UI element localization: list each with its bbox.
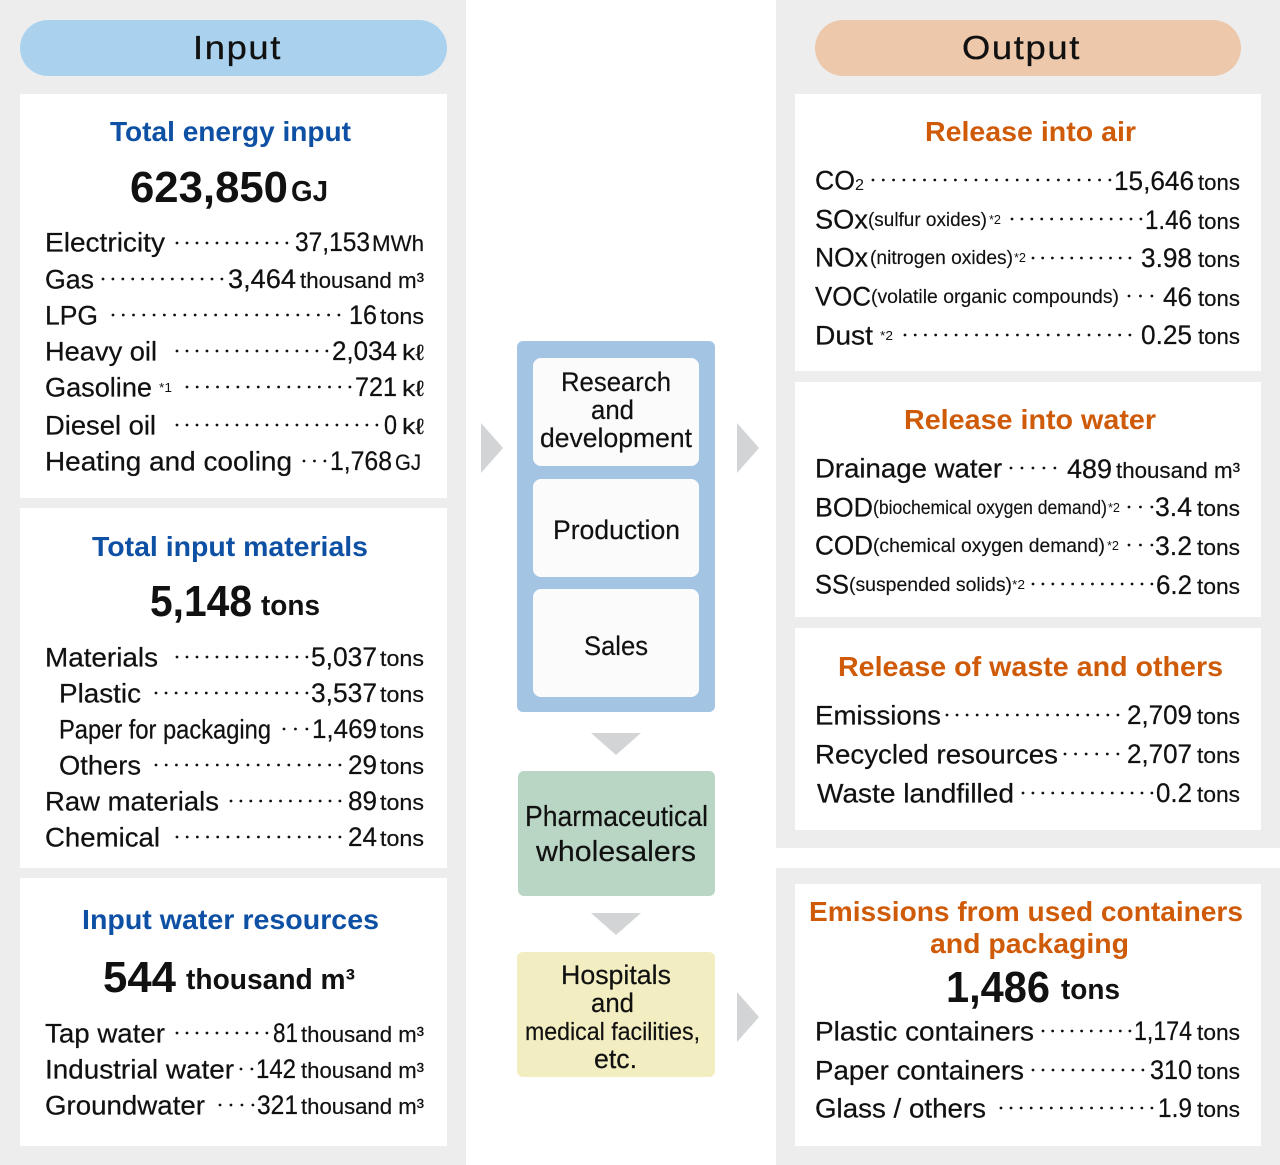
row: heavy oil xyxy=(45,336,425,366)
panel: output background upper xyxy=(776,0,1280,848)
row: groundwater: thousand m³ xyxy=(301,1094,424,1119)
row: diesel oil: 0 xyxy=(384,410,397,440)
row: recycled resources: 2,707 xyxy=(1127,739,1192,769)
row: SS: 6.2 xyxy=(1156,570,1192,600)
row: heating and cooling: Heating and cooling xyxy=(45,446,292,476)
row: SOx: SOx xyxy=(815,204,868,234)
row: diesel oil: Diesel oil xyxy=(45,410,156,440)
row: NOx: NOx xyxy=(815,242,868,272)
total: 544 thousand m3: thousand m³ xyxy=(186,964,355,996)
row: glass and others: Glass / others xyxy=(815,1093,986,1123)
row: COD: 3.2 xyxy=(1155,531,1192,561)
row: heating and cooling: GJ xyxy=(395,450,421,475)
row: chemical xyxy=(45,822,424,852)
row: plastic containers: tons xyxy=(1197,1020,1240,1045)
heading: Output: Output xyxy=(962,29,1081,66)
row: BOD: tons xyxy=(1197,496,1240,521)
row: NOx: tons xyxy=(1198,247,1240,272)
row: electricity: Electricity xyxy=(45,227,166,257)
row: waste landfilled xyxy=(817,778,1240,808)
row: SOx: 1.46 xyxy=(1145,205,1192,235)
row: gasoline: Gasoline xyxy=(45,372,152,402)
arrow: process to output xyxy=(737,423,759,473)
row: gas: 3,464 xyxy=(228,264,296,294)
panel: emissions from used containers xyxy=(795,884,1261,1146)
row: dust: tons xyxy=(1198,324,1240,349)
row: groundwater: 321 xyxy=(257,1090,298,1120)
row: diesel oil: kℓ xyxy=(402,414,425,439)
box: hospitals and medical facilities: Hospitals xyxy=(561,960,671,990)
heading: Input: Input xyxy=(193,29,282,66)
row: paper containers: Paper containers xyxy=(815,1055,1024,1085)
title: emissions from used containers and packaging: Emissions from used containers xyxy=(809,896,1243,927)
box: research and development: development xyxy=(540,423,692,453)
row: paper for packaging: tons xyxy=(380,718,424,743)
box: research and development: and xyxy=(591,395,634,425)
row: dust: *2 xyxy=(880,328,893,343)
row: glass and others: tons xyxy=(1197,1097,1240,1122)
panel: company process xyxy=(517,341,715,712)
row: glass and others: 1.9 xyxy=(1158,1093,1192,1123)
row: gasoline xyxy=(45,372,425,402)
box: production xyxy=(533,479,699,577)
box: pharmaceutical wholesalers xyxy=(518,771,715,896)
row: heavy oil: 2,034 xyxy=(332,336,397,366)
heading: Input xyxy=(20,20,447,76)
row: materials: Materials xyxy=(45,642,158,672)
row: waste landfilled: tons xyxy=(1197,782,1240,807)
row: COD: *2 xyxy=(1107,538,1119,553)
row: raw materials: Raw materials xyxy=(45,786,219,816)
box: research and development xyxy=(533,358,699,466)
row: BOD: BOD xyxy=(815,492,873,522)
box: hospitals and medical facilities xyxy=(517,952,715,1077)
row: drainage water: Drainage water xyxy=(815,453,1002,483)
row: others: tons xyxy=(380,754,424,779)
row: drainage water: 489 xyxy=(1067,454,1112,484)
row: plastic xyxy=(59,678,424,708)
row: BOD xyxy=(815,492,1240,522)
row: VOC: (volatile organic compounds) xyxy=(871,287,1119,308)
row: VOC: tons xyxy=(1198,286,1240,311)
row: LPG: LPG xyxy=(45,300,98,330)
row: electricity: MWh xyxy=(372,231,424,256)
row: electricity xyxy=(45,227,424,257)
row: heavy oil: Heavy oil xyxy=(45,336,157,366)
row: plastic: tons xyxy=(380,682,424,707)
box: hospitals and medical facilities: etc. xyxy=(594,1044,637,1074)
row: materials xyxy=(45,642,424,672)
row: plastic containers: 1,174 xyxy=(1134,1016,1192,1046)
row: others: Others xyxy=(59,750,141,780)
title: emissions from used containers and packaging xyxy=(809,896,1243,959)
row: paper containers: 310 xyxy=(1150,1055,1192,1085)
total: 1,486 tons: tons xyxy=(1061,974,1120,1006)
panel: total input materials xyxy=(20,508,447,868)
row: BOD: 3.4 xyxy=(1155,492,1192,522)
row: BOD: (biochemical oxygen demand) xyxy=(873,498,1107,519)
box: hospitals and medical facilities: medical facilities, xyxy=(525,1018,700,1046)
row: plastic containers xyxy=(815,1016,1240,1046)
row: CO2: CO xyxy=(815,165,855,195)
title: emissions from used containers and packaging: and packaging xyxy=(930,928,1129,959)
total: 5,148 tons: tons xyxy=(261,590,320,622)
row: COD: (chemical oxygen demand) xyxy=(873,536,1105,557)
row: others xyxy=(59,750,424,780)
row: SS: *2 xyxy=(1012,577,1025,592)
row: paper for packaging: 1,469 xyxy=(312,714,377,744)
row: NOx: (nitrogen oxides) xyxy=(870,248,1013,269)
row: SOx: tons xyxy=(1198,209,1240,234)
row: industrial water: 142 xyxy=(256,1054,296,1084)
row: recycled resources: Recycled resources xyxy=(815,739,1058,769)
row: recycled resources xyxy=(815,739,1240,769)
box: sales: Sales xyxy=(584,631,648,661)
row: CO2 xyxy=(815,165,1240,196)
panel: total energy input xyxy=(20,94,447,498)
title: input water resources: Input water resources xyxy=(82,904,379,935)
title: total energy input: Total energy input xyxy=(110,116,351,147)
row: paper for packaging: Paper for packaging xyxy=(59,714,271,744)
row: dust: 0.25 xyxy=(1141,320,1192,350)
row: CO2: 2 xyxy=(855,177,864,194)
row: emissions xyxy=(815,700,1240,730)
row: SS: (suspended solids) xyxy=(849,575,1012,596)
row: NOx xyxy=(815,242,1240,273)
row: materials: tons xyxy=(380,646,424,671)
total: 623,850 GJ: GJ xyxy=(291,176,328,208)
row: SS xyxy=(815,569,1240,600)
row: emissions: tons xyxy=(1197,704,1240,729)
row: VOC: VOC xyxy=(815,281,871,311)
arrow: hospitals to output xyxy=(737,992,759,1042)
row: gas: Gas xyxy=(45,264,94,294)
row: diesel oil xyxy=(45,410,425,440)
panel: output background lower xyxy=(776,868,1280,1165)
row: drainage water: thousand m³ xyxy=(1116,458,1240,483)
row: plastic: 3,537 xyxy=(311,678,377,708)
panel: input background xyxy=(0,0,466,1165)
row: COD: tons xyxy=(1197,535,1240,560)
row: heavy oil: kℓ xyxy=(402,340,425,365)
title: release into air: Release into air xyxy=(925,116,1136,147)
arrow: input to process xyxy=(481,423,503,473)
row: emissions: 2,709 xyxy=(1127,700,1192,730)
box: hospitals and medical facilities: and xyxy=(591,988,634,1018)
row: waste landfilled: 0.2 xyxy=(1156,778,1192,808)
box: pharmaceutical wholesalers: Pharmaceutical xyxy=(525,801,708,833)
row: dust xyxy=(815,320,1240,350)
total: 1,486 tons: 1,486 xyxy=(946,963,1050,1012)
row: plastic containers: Plastic containers xyxy=(815,1016,1034,1046)
row: industrial water: thousand m³ xyxy=(301,1058,424,1083)
row: groundwater xyxy=(45,1090,424,1120)
row: raw materials xyxy=(45,786,424,816)
arrow: wholesalers to hospitals xyxy=(591,913,641,935)
title: total input materials: Total input materials xyxy=(92,531,368,562)
row: emissions: Emissions xyxy=(815,700,941,730)
row: gasoline: 721 xyxy=(355,372,397,402)
row: SOx: *2 xyxy=(989,212,1001,227)
row: plastic: Plastic xyxy=(59,678,141,708)
row: VOC xyxy=(815,281,1240,312)
row: gas: thousand m³ xyxy=(300,268,424,293)
row: tap water: Tap water xyxy=(45,1018,165,1048)
row: heating and cooling xyxy=(45,446,421,476)
arrow: process to wholesalers xyxy=(591,733,641,755)
row: LPG: 16 xyxy=(349,300,377,330)
row: tap water: 81 xyxy=(273,1018,298,1048)
panel: release into air xyxy=(795,94,1261,371)
row: electricity: 37,153 xyxy=(295,227,370,257)
row: recycled resources: tons xyxy=(1197,743,1240,768)
row: SS: SS xyxy=(815,569,849,599)
row: NOx: *2 xyxy=(1014,250,1026,265)
row: paper containers xyxy=(815,1055,1240,1085)
row: SOx: (sulfur oxides) xyxy=(868,210,987,231)
row: SS: tons xyxy=(1197,574,1240,599)
row: LPG xyxy=(45,300,424,330)
row: NOx: 3.98 xyxy=(1141,243,1192,273)
row: raw materials: 89 xyxy=(348,786,377,816)
total: 5,148 tons xyxy=(150,577,320,626)
row: tap water xyxy=(45,1018,424,1048)
panel: release into water xyxy=(795,382,1261,617)
row: industrial water: Industrial water xyxy=(45,1054,234,1084)
row: chemical: Chemical xyxy=(45,822,160,852)
total: 1,486 tons xyxy=(946,963,1120,1012)
row: others: 29 xyxy=(348,750,377,780)
row: CO2: tons xyxy=(1198,170,1240,195)
row: chemical: tons xyxy=(380,826,424,851)
total: 544 thousand m3: 544 xyxy=(103,953,177,1002)
total: 5,148 tons: 5,148 xyxy=(150,577,252,626)
row: glass and others xyxy=(815,1093,1240,1123)
row: LPG: tons xyxy=(380,304,424,329)
row: drainage water xyxy=(815,453,1240,484)
row: gasoline: *1 xyxy=(159,380,172,395)
row: gasoline: kℓ xyxy=(402,376,425,401)
row: industrial water xyxy=(45,1054,424,1084)
row: paper containers: tons xyxy=(1197,1059,1240,1084)
row: materials: 5,037 xyxy=(311,642,377,672)
heading: Output xyxy=(815,20,1241,76)
box: production: Production xyxy=(553,515,680,545)
panel: release of waste and others xyxy=(795,628,1261,830)
row: paper for packaging xyxy=(59,714,424,744)
total: 544 thousand m3 xyxy=(103,953,355,1002)
panel: input water resources xyxy=(20,878,447,1146)
row: COD xyxy=(815,530,1240,561)
row: raw materials: tons xyxy=(380,790,424,815)
row: tap water: thousand m³ xyxy=(301,1022,424,1047)
row: CO2: 15,646 xyxy=(1114,166,1194,196)
row: BOD: *2 xyxy=(1108,500,1120,515)
row: VOC: 46 xyxy=(1163,282,1192,312)
title: release into water: Release into water xyxy=(904,404,1156,435)
row: COD: COD xyxy=(815,530,873,560)
box: pharmaceutical wholesalers: wholesalers xyxy=(535,836,696,868)
row: heating and cooling: 1,768 xyxy=(330,446,392,476)
title: release of waste and others: Release of waste and others xyxy=(838,651,1223,682)
row: chemical: 24 xyxy=(348,822,377,852)
total: 623,850 GJ: 623,850 xyxy=(130,163,288,212)
row: waste landfilled: Waste landfilled xyxy=(817,778,1014,808)
row: gas xyxy=(45,264,424,294)
row: dust: Dust xyxy=(815,320,874,350)
box: research and development: Research xyxy=(561,367,671,397)
row: groundwater: Groundwater xyxy=(45,1090,205,1120)
box: sales xyxy=(533,589,699,697)
row: SOx xyxy=(815,204,1240,235)
